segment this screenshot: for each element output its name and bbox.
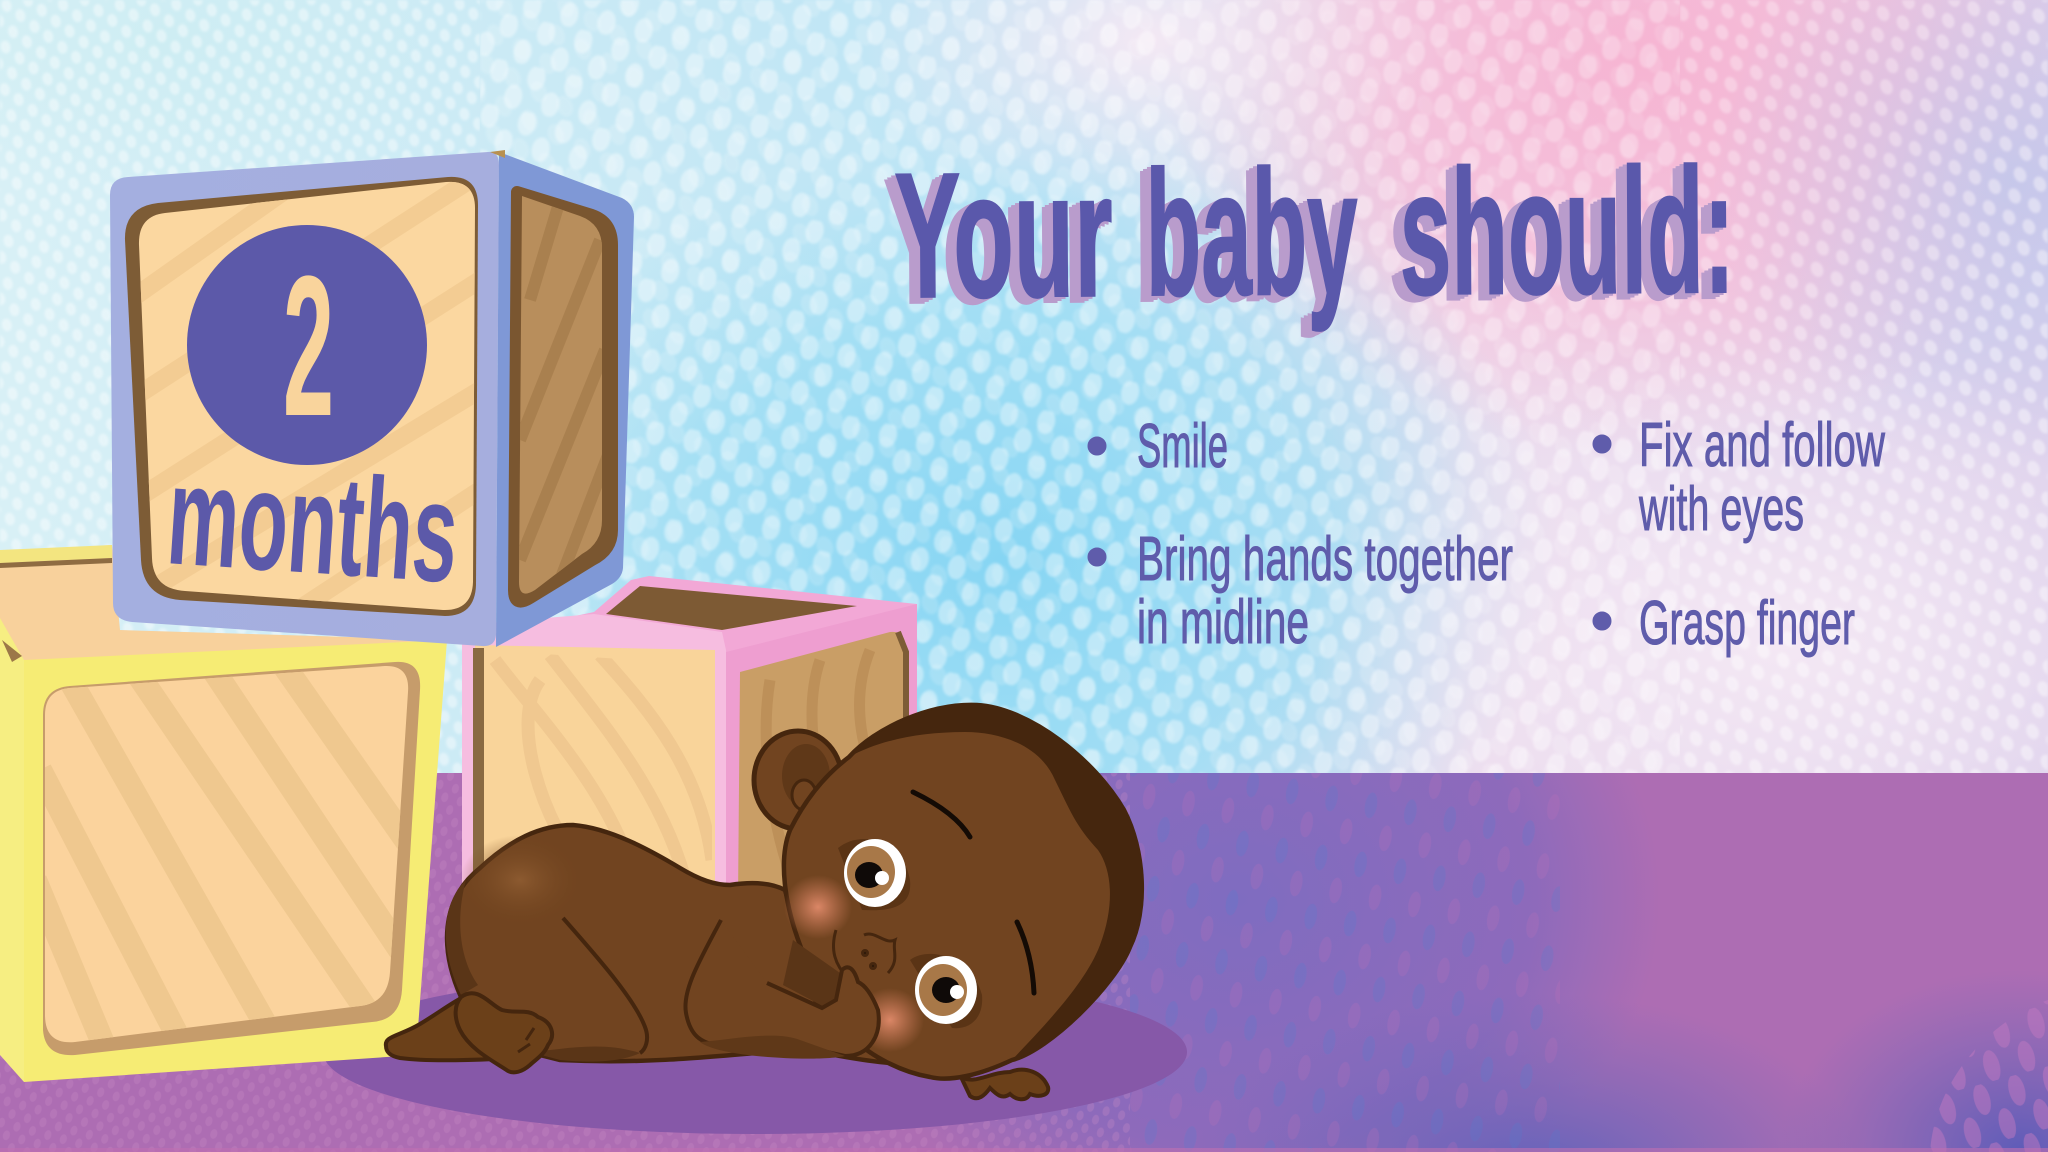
yellow block xyxy=(0,545,447,1082)
blue block with month label: 2 xyxy=(283,235,334,458)
baby illustration xyxy=(386,705,1142,1099)
bullet: Fix and follow with eyes: Fix and follow xyxy=(1639,411,1885,480)
head xyxy=(784,705,1142,1079)
cheeks xyxy=(784,875,852,939)
title xyxy=(894,131,1735,335)
arm and hand xyxy=(685,920,879,1059)
ear xyxy=(754,731,842,829)
eyebrows xyxy=(913,792,970,837)
bullet list: right column xyxy=(1593,411,1885,658)
eye right xyxy=(910,954,982,1028)
bullet list: left column xyxy=(1088,412,1513,657)
floor shadow under baby xyxy=(323,970,1187,1134)
pink block xyxy=(462,576,917,900)
bullet: Grasp finger: Grasp finger xyxy=(1639,589,1855,658)
blue block with month label xyxy=(110,150,634,647)
bullet: Fix and follow with eyes xyxy=(1593,411,1885,544)
bullet: Grasp finger xyxy=(1593,589,1855,658)
bullet: Bring hands together in midline: Bring hands together xyxy=(1137,525,1513,594)
foot xyxy=(456,993,552,1072)
months label: months xyxy=(163,435,463,613)
month badge circle xyxy=(187,225,427,465)
hair xyxy=(849,705,1142,1060)
bullet: Bring hands together in midline: in midline xyxy=(1137,588,1309,657)
bullet: Bring hands together in midline xyxy=(1088,525,1513,657)
back leg xyxy=(386,994,510,1060)
bullet: Smile: Smile xyxy=(1137,412,1228,481)
eye left xyxy=(838,839,910,910)
lower hand xyxy=(961,1070,1048,1099)
title word: baby: baby xyxy=(1145,133,1358,333)
title word: should: should: xyxy=(1399,131,1735,332)
title word: Your: Your xyxy=(894,135,1113,335)
nose and mouth xyxy=(833,930,895,978)
background wall xyxy=(0,0,2048,774)
body xyxy=(446,825,890,1063)
floor xyxy=(0,773,2048,1152)
bullet: Smile xyxy=(1088,412,1228,481)
bullet: Fix and follow with eyes: with eyes xyxy=(1638,475,1804,544)
